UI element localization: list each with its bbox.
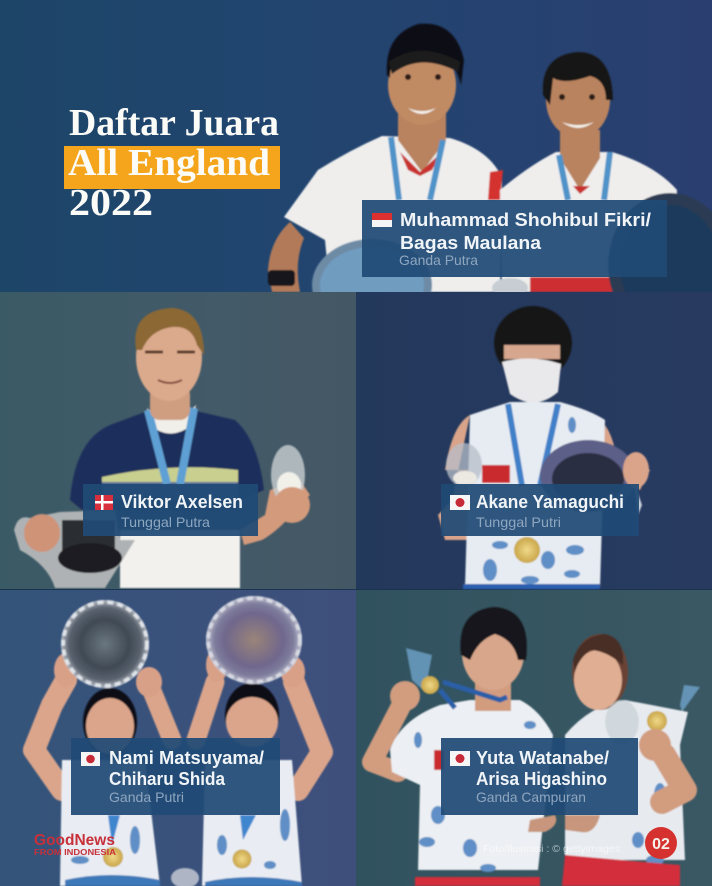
photo: Fikri and Bagas: [268, 24, 712, 337]
panel: men's singles: [0, 292, 356, 589]
logo tagline: FROM INDONESIA: [34, 848, 116, 857]
category: Tunggal Putra: [121, 514, 210, 530]
flag: Japan: [81, 752, 100, 766]
player name line two: Bagas Maulana: [400, 233, 542, 253]
player name line two: Arisa Higashino: [476, 769, 607, 789]
photo: Viktor Axelsen: [14, 308, 310, 588]
title line: 2022: 2022: [69, 182, 153, 224]
category: Ganda Campuran: [476, 789, 586, 805]
panel: top doubles champions: [0, 0, 712, 337]
panel: mixed doubles: [356, 590, 712, 886]
flag: Denmark: [95, 495, 113, 510]
caption: women's singles: [441, 484, 639, 536]
player name: Akane Yamaguchi: [476, 492, 624, 512]
player name line two: Chiharu Shida: [109, 769, 226, 789]
photo: Akane Yamaguchi: [438, 306, 650, 589]
title line: Daftar Juara: Daftar Juara: [69, 102, 279, 144]
title line: All England: All England: [68, 142, 270, 184]
category: Tunggal Putri: [476, 514, 561, 530]
highlight box: [64, 146, 280, 189]
caption: men's singles: [83, 484, 258, 536]
flag: Indonesia: [372, 213, 392, 227]
logo: GoodNews from Indonesia: [34, 832, 116, 857]
flag: Japan: [450, 495, 470, 510]
category: Ganda Putra: [399, 252, 478, 268]
player names: Yuta Watanabe/: [476, 748, 609, 768]
caption: mixed doubles: [441, 738, 638, 815]
category: Ganda Putri: [109, 789, 184, 805]
logo: GoodNews from Indonesia: GoodNews: [34, 832, 115, 849]
page number badge: 02: [652, 836, 670, 853]
page number badge: [645, 827, 677, 859]
caption: women's doubles: [71, 738, 280, 815]
player names: Nami Matsuyama/: [109, 748, 264, 768]
flag: Japan: [450, 751, 470, 766]
photo credit: Foto/Ilustrasi : © gettyimages: [483, 843, 620, 855]
photo: Yuta Watanabe and Arisa Higashino: [372, 607, 700, 886]
panel: women's doubles: [0, 590, 356, 886]
photo: Nami Matsuyama and Chiharu Shida: [34, 596, 322, 886]
panel: women's singles: [356, 292, 712, 589]
caption: men's doubles: [362, 200, 667, 277]
player names: Muhammad Shohibul Fikri/: [400, 210, 651, 230]
player name: Viktor Axelsen: [121, 492, 243, 512]
title: [64, 102, 280, 224]
